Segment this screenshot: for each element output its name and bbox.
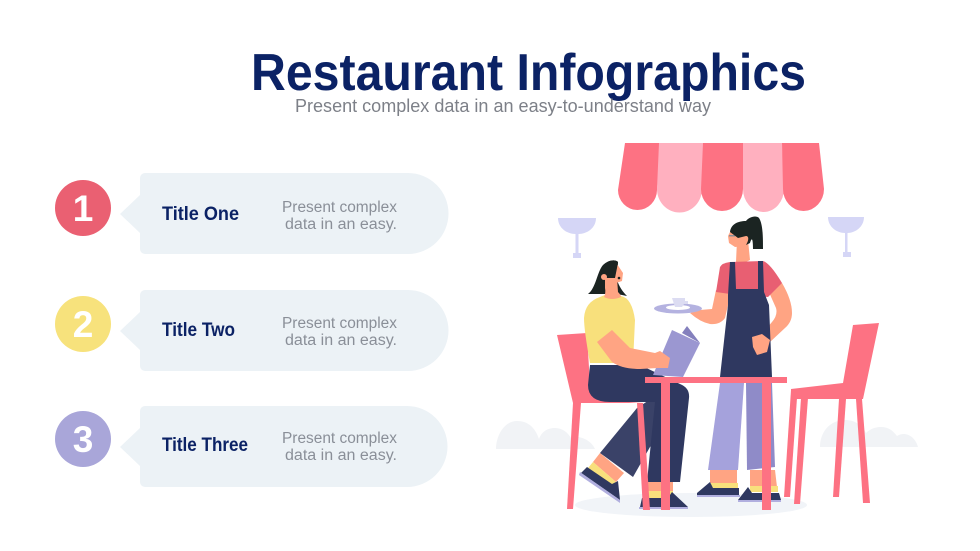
- book: [653, 326, 700, 377]
- wine glass left: [558, 218, 596, 258]
- trousers: [588, 365, 689, 482]
- panel: item two: [55, 290, 448, 371]
- face: [607, 264, 623, 283]
- text block two: data in an easy.: [285, 332, 397, 349]
- number badge three: 3: [73, 419, 93, 460]
- heading: title one: Title One: [162, 204, 239, 225]
- ear: [601, 274, 607, 280]
- number badge one: [55, 180, 111, 236]
- cloud right: [820, 420, 918, 447]
- glasses: [729, 235, 735, 236]
- heading: title two: Title Two: [162, 320, 235, 341]
- bare arm left with hand: [690, 290, 729, 324]
- forearm and hand: [597, 330, 670, 369]
- text block two: Present complex: [282, 315, 397, 332]
- text block three: Present complex: [282, 430, 397, 447]
- front lower leg and shoe: [639, 480, 688, 509]
- text block one: [282, 199, 397, 233]
- subtitle: Present complex data in an easy-to-understand way: [295, 96, 711, 116]
- trousers: [708, 383, 744, 470]
- hand on apron: [752, 334, 770, 355]
- number badge two: 2: [73, 304, 93, 345]
- mouth: [618, 277, 620, 279]
- cloud left: [496, 421, 595, 449]
- panel: item three: [55, 406, 448, 487]
- shirt: [584, 294, 635, 363]
- ground shadow: [575, 493, 807, 517]
- chair back and seat: [557, 333, 643, 403]
- neck: [736, 240, 750, 263]
- heading: title three: Title Three: [162, 435, 248, 456]
- illustration: restaurant scene: [496, 143, 918, 517]
- title: Restaurant Infographics: [251, 44, 806, 102]
- apron: [720, 261, 772, 377]
- neck: [604, 278, 621, 299]
- panel: item one: [55, 173, 448, 254]
- hair fringe: [603, 260, 618, 278]
- callout card three: [120, 406, 448, 487]
- right chair: [784, 323, 879, 504]
- wine glass right: [828, 217, 864, 257]
- back leg and foot: [579, 395, 660, 503]
- seated woman and chair: [557, 260, 700, 510]
- text block two: [282, 315, 397, 349]
- callout card two: [120, 290, 448, 371]
- number badge two: [55, 296, 111, 352]
- waitress: [654, 217, 792, 502]
- table: [645, 377, 787, 510]
- hair and ponytail: [730, 217, 763, 249]
- text block one: data in an easy.: [285, 216, 397, 233]
- text block one: Present complex: [282, 199, 397, 216]
- awning: [618, 143, 824, 213]
- bare arm right: [760, 283, 792, 342]
- tee shirt: [716, 261, 782, 297]
- tray with cup: [654, 298, 702, 314]
- chair legs: [567, 403, 650, 510]
- number badge three: [55, 411, 111, 467]
- head: [728, 232, 750, 247]
- ankles and shoes: [697, 470, 781, 502]
- number badge one: 1: [73, 188, 93, 229]
- text block three: [282, 430, 397, 464]
- hair back: [588, 260, 627, 296]
- text block three: data in an easy.: [285, 447, 397, 464]
- callout card one: [120, 173, 448, 254]
